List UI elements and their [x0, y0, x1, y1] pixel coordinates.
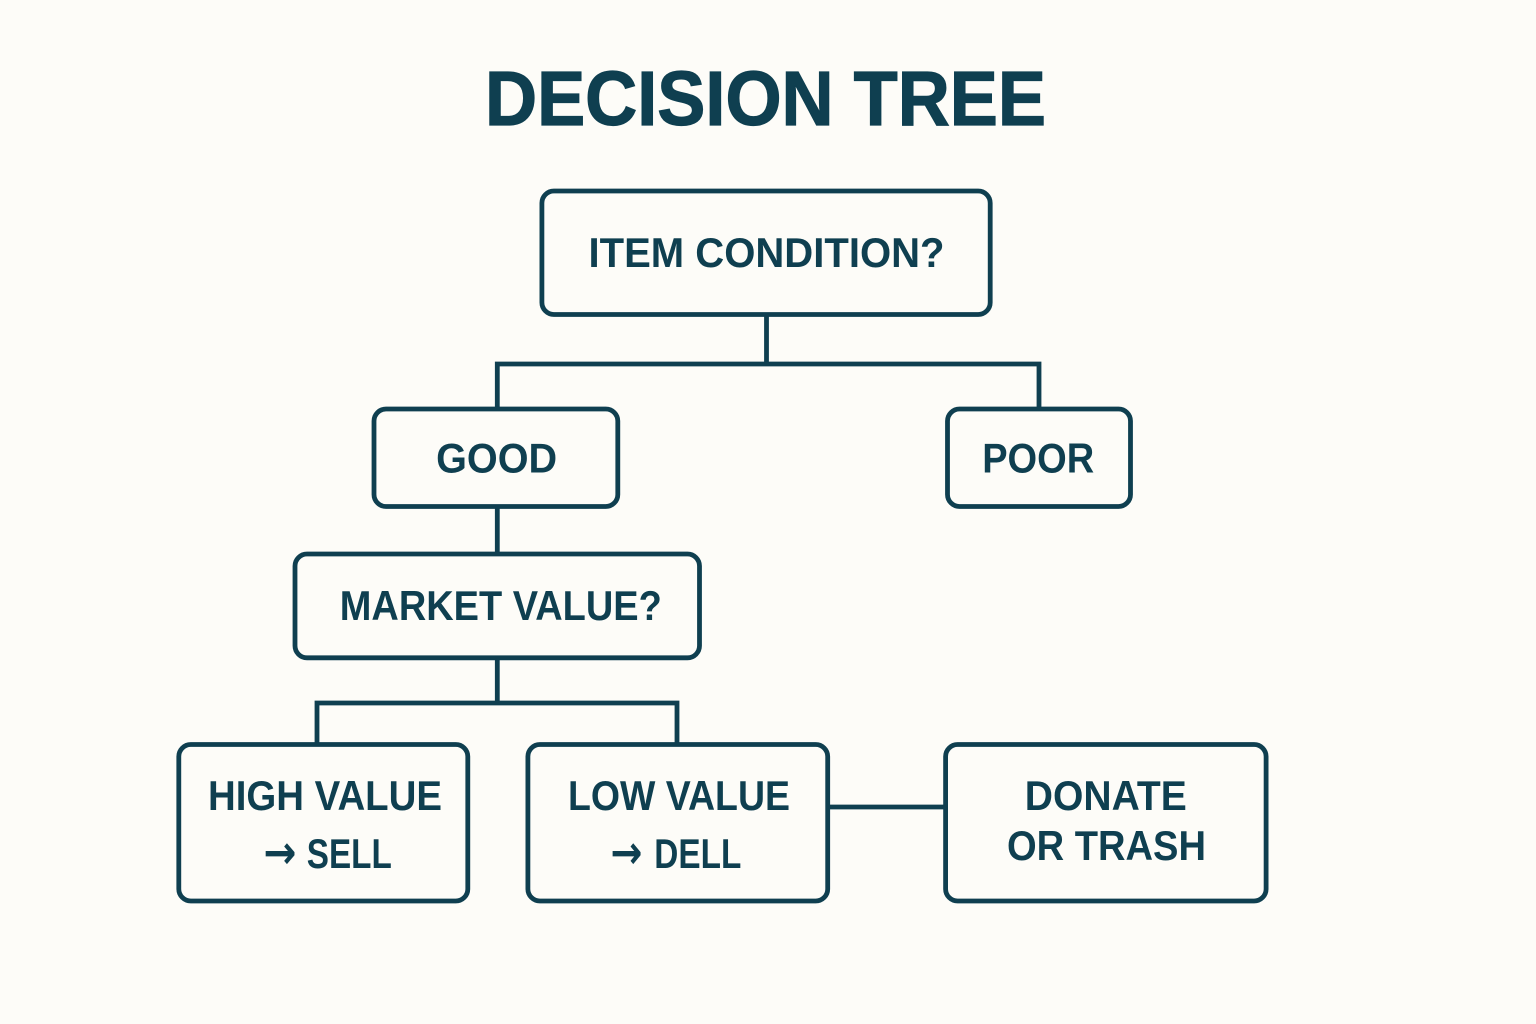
box: market value: MARKET VALUE?	[340, 582, 662, 629]
box: low value dell: →	[610, 825, 642, 879]
box: high value sell: →	[264, 825, 296, 879]
box: donate or trash: OR TRASH	[1007, 822, 1206, 869]
box: donate or trash: DONATE	[1025, 772, 1187, 819]
box: high value sell	[179, 744, 468, 901]
box: good: GOOD	[436, 434, 557, 481]
box: donate or trash	[946, 744, 1266, 901]
connectors	[317, 315, 1039, 807]
box: low value dell: DELL	[654, 830, 741, 877]
box: low value dell: LOW VALUE	[568, 772, 790, 819]
box: high value sell: HIGH VALUE	[208, 772, 442, 819]
box: good	[374, 409, 618, 506]
box: market value	[295, 554, 700, 658]
box: poor: POOR	[982, 434, 1094, 481]
box: low value dell	[528, 744, 828, 901]
box: high value sell: SELL	[307, 830, 392, 877]
box: poor	[948, 409, 1130, 506]
title: DECISION TREE	[485, 56, 1046, 142]
box: item condition: ITEM CONDITION?	[588, 229, 944, 276]
box: item condition	[542, 191, 990, 314]
